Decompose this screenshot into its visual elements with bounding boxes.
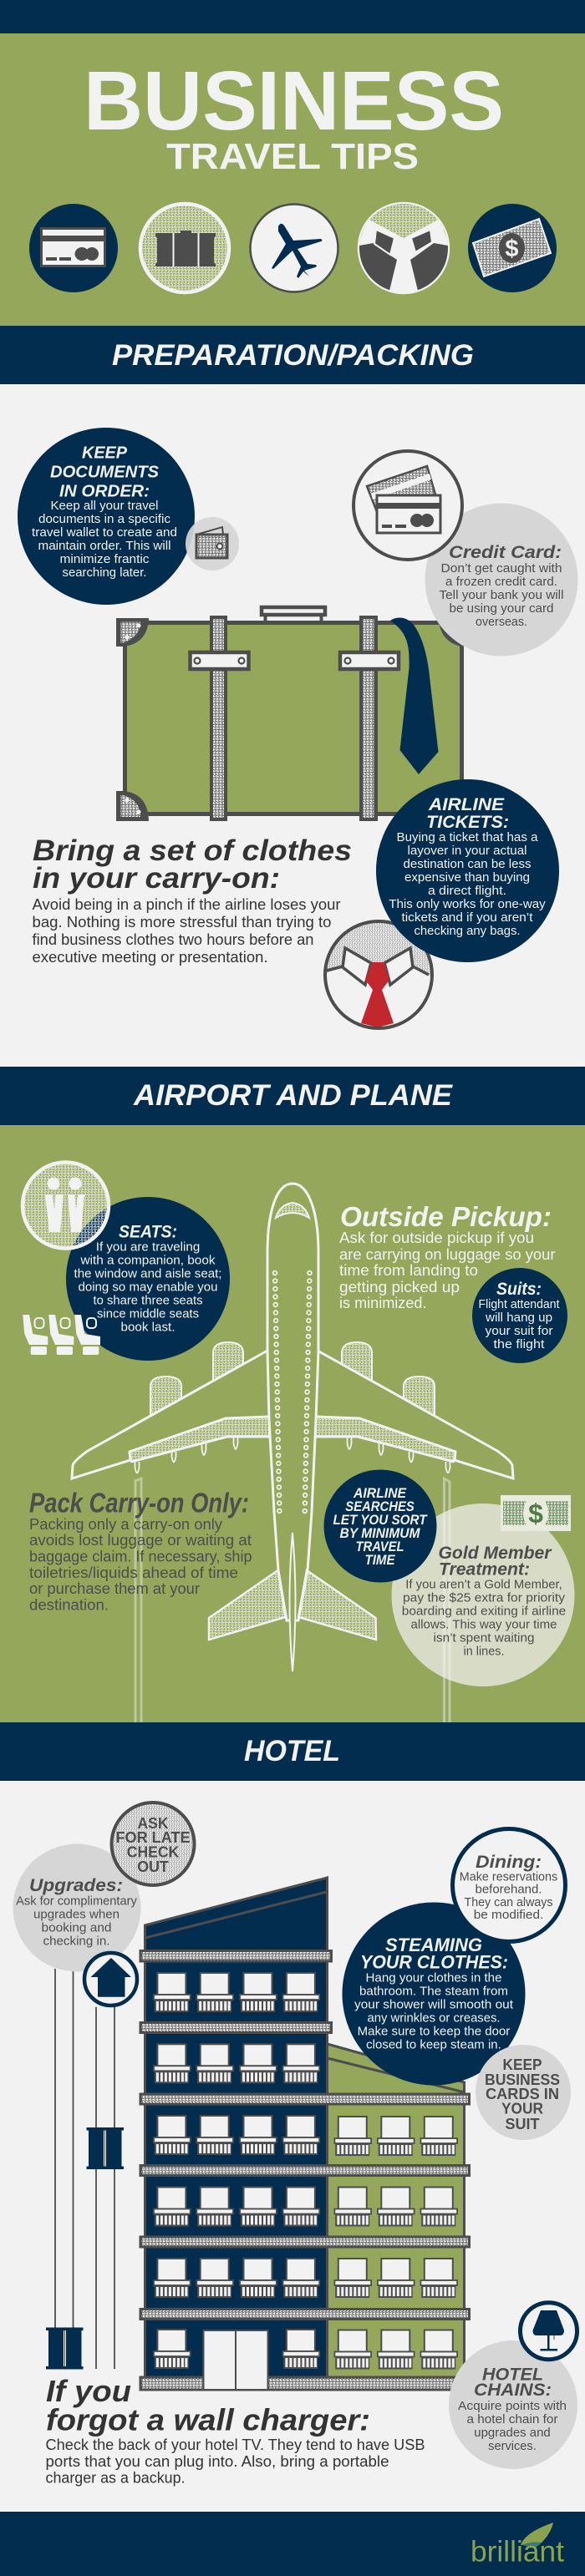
circle: steaming your clothes: STEAMING xyxy=(385,1935,482,1955)
circle: suits tip: will hang up xyxy=(485,1311,552,1325)
text: gold member treatment: boarding and exiting if airline xyxy=(402,1605,566,1619)
circle: steaming your clothes: closed to keep steam in. xyxy=(366,2039,501,2052)
circle: dining tip xyxy=(453,1829,565,1941)
green wing xyxy=(328,2044,465,2381)
text: gold member treatment: pay the $25 extra for priority xyxy=(403,1592,566,1605)
logo: brilliant: brilliant xyxy=(471,2536,564,2568)
text block: bring a set of clothes: find business clothes two hours before an xyxy=(32,931,313,948)
circle: upgrades tip: Upgrades: xyxy=(29,1876,123,1895)
circle: steaming your clothes: Hang your clothes in the xyxy=(366,1972,501,1985)
pylons xyxy=(135,1437,450,1473)
panel: airport background xyxy=(0,1125,585,1722)
icon: up arrow xyxy=(84,1953,137,2006)
circle: ask for late check out: ASK xyxy=(137,1815,169,1832)
tailplanes xyxy=(209,1570,376,1640)
text: gold member treatment: isn’t spent waiting xyxy=(433,1632,535,1645)
circle: airline tickets: destination can be less xyxy=(403,858,532,871)
elevator cables xyxy=(55,1969,114,2369)
icon: wallet xyxy=(186,517,239,570)
text block: outside pickup: time from landing to xyxy=(339,1262,478,1279)
necktie xyxy=(390,617,438,774)
circle: airline searches: TIME xyxy=(364,1553,395,1568)
icon: two travelers xyxy=(23,1163,109,1248)
circle: suits tip xyxy=(472,1268,567,1363)
circle: hotel chains tip: CHAINS: xyxy=(474,2381,552,2400)
icon: dollar bill xyxy=(501,1495,571,1531)
text block: if you forgot a wall charger: forgot a wall charger: xyxy=(46,2403,370,2437)
circle: dining tip: Make reservations xyxy=(460,1871,557,1884)
circle: suits tip: the flight xyxy=(493,1338,545,1351)
circle: seats tip: to share three seats xyxy=(94,1295,202,1308)
corners xyxy=(116,618,467,821)
text block: bring a set of clothes: Avoid being in a pinch if the airline loses your xyxy=(32,896,341,913)
text: gold member treatment: allows. This way your time xyxy=(411,1619,557,1632)
suitcase illustration xyxy=(0,0,467,821)
circle: gold member background xyxy=(391,1504,575,1686)
text: gold member treatment: If you aren’t a Gold Member, xyxy=(405,1579,562,1592)
circle: upgrades tip: booking and xyxy=(42,1922,112,1935)
circle: steaming your clothes: YOUR CLOTHES: xyxy=(360,1952,508,1973)
section header: airport and plane: AIRPORT AND PLANE xyxy=(133,1079,454,1112)
text block: if you forgot a wall charger: charger as a backup. xyxy=(45,2469,186,2486)
text block: bring a set of clothes xyxy=(32,834,352,966)
circle: seats tip: If you are traveling xyxy=(96,1241,200,1255)
wing flaps xyxy=(130,1417,455,1462)
text block: pack carry-on only: Pack Carry-on Only: xyxy=(29,1488,249,1519)
text block: pack carry-on only: destination. xyxy=(29,1597,109,1614)
circle: upgrades tip: upgrades when xyxy=(33,1909,120,1922)
text block: bring a set of clothes: Bring a set of clothes xyxy=(33,834,352,867)
circle: dining tip: They can always xyxy=(465,1896,553,1909)
text block: pack carry-on only: avoids lost luggage or waiting at xyxy=(29,1532,252,1549)
circle: dining tip: be modified. xyxy=(474,1909,543,1922)
circle: airline tickets: expensive than buying xyxy=(404,871,530,885)
hotel building xyxy=(140,1878,470,2390)
circle: steaming your clothes: Make sure to keep the door xyxy=(358,2026,510,2039)
circle: keep business cards in your suit: SUIT xyxy=(505,2115,540,2132)
text: gold member treatment: Treatment: xyxy=(439,1560,530,1580)
circle: airline searches: BY MINIMUM xyxy=(339,1526,421,1541)
text block: pack carry-on only xyxy=(29,1488,252,1614)
circle: upgrades tip: Ask for complimentary xyxy=(16,1895,138,1909)
circle: hotel chains tip: HOTEL xyxy=(482,2366,543,2384)
circle: hotel chains tip: upgrades and xyxy=(474,2426,551,2440)
text: gold member treatment: Gold Member xyxy=(438,1544,552,1563)
footer bar xyxy=(0,2512,585,2576)
icon: dollar bill: $ xyxy=(528,1498,543,1529)
circle: dining tip: beforehand. xyxy=(475,1884,542,1897)
circle: credit card tip: overseas. xyxy=(476,616,527,629)
tail fin xyxy=(289,1533,296,1671)
circle: airline tickets: checking any bags. xyxy=(415,925,520,938)
circle: airline searches: LET YOU SORT xyxy=(333,1513,428,1528)
circle: ask for late check out: CHECK xyxy=(127,1844,179,1861)
icon: airplane seats xyxy=(23,1315,100,1355)
circle: dining tip: Dining: xyxy=(476,1853,542,1872)
circle: airline searches: AIRLINE xyxy=(353,1486,407,1501)
circle: keep documents in order: KEEP xyxy=(82,444,128,463)
floor bands xyxy=(140,1951,470,2390)
circle: steaming your clothes: any wrinkles or creases. xyxy=(368,2012,500,2026)
elevator: lower xyxy=(46,2327,84,2369)
circle: keep documents in order: IN ORDER: xyxy=(59,483,150,501)
cockpit window xyxy=(276,1203,309,1218)
circle: keep documents in order: travel wallet to create and xyxy=(32,526,177,540)
circle: airline searches: TRAVEL xyxy=(356,1539,404,1554)
section header: preparation/packing xyxy=(0,326,585,384)
circle: seats tip: doing so may enable you xyxy=(79,1281,217,1295)
circle: keep business cards in your suit: YOUR xyxy=(501,2100,543,2117)
circle: steaming your clothes xyxy=(343,1903,525,2085)
circle: credit card tip: Credit Card: xyxy=(449,543,562,562)
circle: keep business cards in your suit: CARDS IN xyxy=(486,2085,559,2102)
circle: steaming your clothes: your shower will smooth out xyxy=(354,1999,513,2012)
icon: credit card xyxy=(29,204,118,292)
elevator: upper xyxy=(87,2127,124,2169)
circle: keep documents in order: maintain order. This will xyxy=(38,540,171,553)
circle: upgrades tip xyxy=(13,1844,140,1971)
icon: suitcase xyxy=(140,204,229,292)
circle: keep documents in order: DOCUMENTS xyxy=(50,464,160,482)
airplane illustration xyxy=(72,1184,513,1671)
circle: keep documents in order: minimize frantic xyxy=(60,553,149,566)
circle: keep business cards in your suit xyxy=(476,2045,571,2140)
circle: keep documents in order: documents in a specific xyxy=(38,513,170,526)
circle: airline tickets: layover in your actual xyxy=(408,844,526,858)
circle: ask for late check out: OUT xyxy=(137,1858,169,1875)
section header: preparation/packing: PREPARATION/PACKING xyxy=(112,339,474,372)
cabin windows xyxy=(275,1273,309,1511)
circle: keep business cards in your suit: KEEP xyxy=(503,2056,542,2073)
circle: credit card tip: be using your card xyxy=(450,602,553,616)
windows: green wing xyxy=(334,2117,457,2369)
section header: airport and plane xyxy=(0,1067,585,1125)
text block: if you forgot a wall charger xyxy=(45,2374,425,2486)
circle: credit card tip xyxy=(425,503,578,657)
circle: airline searches xyxy=(324,1470,436,1582)
circle: ask for late check out: FOR LATE xyxy=(115,1829,191,1846)
circle: keep business cards in your suit: BUSINESS xyxy=(485,2071,560,2088)
circle: credit card tip: a frozen credit card. xyxy=(445,576,557,589)
handle xyxy=(262,607,325,622)
text block: bring a set of clothes: executive meeting or presentation. xyxy=(32,949,267,966)
text block: bring a set of clothes: in your carry-on: xyxy=(33,862,280,895)
windows: tower xyxy=(154,1973,319,2369)
fuselage xyxy=(267,1184,318,1620)
text block: bring a set of clothes: bag. Nothing is more stressful than trying to xyxy=(32,914,331,931)
circle: airline tickets: This only works for one-way xyxy=(389,898,547,911)
circle: hotel chains tip: a hotel chain for xyxy=(466,2413,558,2426)
section header: hotel: HOTEL xyxy=(244,1735,340,1767)
circle: suits tip: your suit for xyxy=(485,1325,553,1338)
title: BUSINESS xyxy=(84,54,504,148)
circle: keep documents in order: Keep all your travel xyxy=(50,499,159,513)
contrails xyxy=(135,1478,450,1722)
section header: hotel xyxy=(0,1722,585,1781)
circle: seats tip: the window and aisle seat; xyxy=(74,1268,222,1281)
circle: airline tickets xyxy=(376,779,559,962)
text block: pack carry-on only: toiletries/liquids ahead of time xyxy=(29,1564,238,1581)
circle: airline tickets: AIRLINE xyxy=(428,795,505,814)
text block: outside pickup: Ask for outside pickup if you xyxy=(339,1230,534,1246)
text block: if you forgot a wall charger: If you xyxy=(46,2374,131,2408)
header panel xyxy=(0,0,585,326)
text block: pack carry-on only: or purchase them at your xyxy=(29,1580,200,1597)
circle: seats tip: with a companion, book xyxy=(79,1255,216,1268)
icon: lamp xyxy=(520,2303,577,2360)
tower body and roof xyxy=(145,1878,328,2381)
engines xyxy=(150,1342,435,1416)
icon: shirt and red tie xyxy=(322,919,435,1028)
icon: suit xyxy=(355,200,452,294)
title: TRAVEL TIPS xyxy=(166,137,419,177)
text: gold member treatment xyxy=(402,1544,566,1659)
circle: seats tip: book last. xyxy=(120,1321,176,1335)
entrance doors xyxy=(204,2330,267,2390)
straps xyxy=(0,0,399,821)
text block: pack carry-on only: Packing only a carry-on only xyxy=(29,1516,222,1533)
circle: credit card tip: Tell your bank you will xyxy=(440,589,563,602)
circle: credit card tip: Don’t get caught with xyxy=(441,562,562,576)
circle: suits tip: Suits: xyxy=(496,1280,542,1299)
text block: outside pickup: getting picked up xyxy=(339,1279,460,1296)
circle: airline tickets: tickets and if you aren’t xyxy=(401,911,533,925)
circle: steaming your clothes: bathroom. The steam from xyxy=(359,1985,508,1999)
wings xyxy=(72,1351,269,1478)
circle: airline tickets: Buying a ticket that has a xyxy=(396,831,538,844)
text: gold member treatment: in lines. xyxy=(463,1645,505,1659)
text block: outside pickup: is minimized. xyxy=(339,1295,426,1311)
text block: outside pickup: Outside Pickup: xyxy=(340,1201,552,1232)
circle: hotel chains tip: Acquire points with xyxy=(458,2400,567,2413)
text block: pack carry-on only: baggage claim. If necessary, ship xyxy=(29,1549,252,1565)
circle: hotel chains tip xyxy=(449,2340,577,2469)
icon: credit cards xyxy=(354,451,462,560)
circle: seats tip: SEATS: xyxy=(119,1223,177,1242)
text block: if you forgot a wall charger: Check the back of your hotel TV. They tend to have USB xyxy=(45,2437,425,2453)
circle: airline tickets: a direct flight. xyxy=(428,885,506,898)
icon: money xyxy=(468,204,557,292)
icon: airplane xyxy=(251,204,338,292)
icon: money: $ xyxy=(505,236,519,262)
text block: if you forgot a wall charger: ports that you can plug into. Also, bring a portable xyxy=(45,2453,389,2470)
circle: hotel chains tip: services. xyxy=(488,2440,537,2453)
circle: ask for late check out xyxy=(112,1803,194,1885)
circle: keep documents in order xyxy=(18,428,195,605)
circle: suits tip: Flight attendant xyxy=(478,1298,560,1311)
circle: seats tip: since middle seats xyxy=(97,1308,199,1321)
text block: outside pickup: are carrying on luggage so your xyxy=(339,1246,556,1263)
text block: outside pickup xyxy=(339,1201,556,1311)
circle: upgrades tip: checking in. xyxy=(43,1935,110,1948)
circle: seats tip xyxy=(66,1197,230,1361)
circle: keep documents in order: searching later. xyxy=(62,566,147,580)
circle: airline searches: SEARCHES xyxy=(345,1499,415,1514)
circle: airline tickets: TICKETS: xyxy=(426,813,509,832)
